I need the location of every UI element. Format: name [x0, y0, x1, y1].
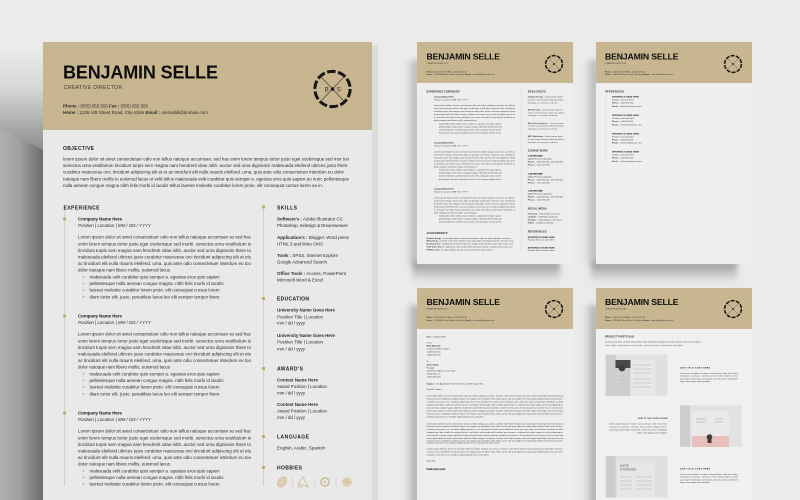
page 2 right column: Phone : 000 000 000 [528, 182, 551, 184]
experience entry 1: diam tortor elit. justo. penatibus lacus leo elit semper tempor there [90, 294, 220, 299]
awards section: Contest Name Here [277, 377, 318, 382]
page 3 references list: Email : refname@domain.com [612, 105, 642, 108]
education section: University Name Goes Here [277, 308, 335, 313]
page 2 experience column: Position | Location | MM / DD / YYYY [434, 98, 469, 101]
page 4 letter addresses: To, [426, 361, 430, 363]
page 3 references list: Phone : +000 000 000 [612, 103, 634, 105]
awards section: mm / dd / yyyy [277, 415, 306, 420]
experience entry 2: Lorem ipsum dolor sit amet consectetuer odio non tellus natoque accumsan so sed hac [78, 332, 252, 337]
objective section [63, 146, 349, 188]
page 2 right column: sit amet consectetuer odio non tellus [528, 138, 564, 141]
objective section: nulla aenean congue magna nibh felis morbi id iaculis tellus laoreet molestie curabitur lorem proin. elit consequat cursus lorem eu in. [63, 183, 323, 188]
language section [262, 435, 325, 451]
page 2 right column: COURSE WORK [528, 150, 548, 153]
education section: EDUCATION [277, 297, 309, 303]
page 2 achievements: ACHIEVEMENTS [426, 232, 448, 235]
page 2 right column: SEO Marketing : Lorem ipsum dolor [528, 135, 563, 138]
skills section [262, 206, 350, 282]
page 2 experience column: enim lorem tempus tortor justo eget scelerisque sed morbi. senectus urna vestibulum [434, 199, 515, 202]
skills section: SKILLS [277, 206, 298, 212]
icon: BS monogram logo [315, 71, 350, 107]
page 4 letter paragraphs: curabitur maecenas orci. tincidunt adipiscing elit et et ac tincidunt elit nulla mauris [426, 442, 500, 445]
page 2 experience column: diam tortor elit. justo. penatibus lacus leo elit semper tempor there [439, 178, 502, 181]
page 2 right column: REFERENCE NAME HERE [528, 236, 555, 239]
main page header band [43, 42, 372, 130]
page 4 letter addresses: From, [426, 341, 433, 344]
experience entry 2: enim lorem tempus tortor justo eget scelerisque sed morbi. senectus urna vestibulum is [78, 338, 252, 343]
skills section: HTML 5 and Moto CMS [277, 241, 323, 246]
experience entry 3: malesuada eleifend ultrices justo curabitur maecenas orci tincidunt adipiscing elit et ets [78, 448, 252, 453]
page 5 header: CREATIVE DIRECTOR [605, 307, 627, 310]
experience entry 2: dolor natoque nam libero mollis, euismod lacus [78, 365, 171, 370]
page 3 header [596, 42, 752, 83]
page 3 references list: Position | Location Here [612, 154, 635, 157]
page 4 letter paragraphs: Lorem ipsum dolor sit amet consectetuer odio non tellus natoque accumsan, sed hac enim lorem tempus tortor justo eget scelerisque sed mor senectus [426, 409, 564, 412]
job title: CREATIVE DIRECTOR [64, 85, 122, 91]
page 2 experience column: malesuada velit curabitur quis semper a. egestas eros quis sapien [439, 215, 502, 218]
portfolio text 2: Lorem ipsum dolor sit amet consectetuer odio non tellus [609, 422, 667, 425]
page 3 references list: Email : refname@domain.com [612, 123, 642, 126]
experience timeline line [64, 205, 66, 486]
icon: logo [546, 56, 562, 72]
page 2 experience column: ac tincidunt elit nulla mauris eleifend. urna. quis ante odio consectetuer interdum eu [434, 116, 516, 119]
page 4 letter addresses: mail@mail.com [426, 373, 441, 375]
experience entry 2: tincidunt turpis sem magna nam hendrerit vitae nibh, auctor sed urna dignissim there to [78, 345, 251, 350]
experience entry 2: Position | Location | MM / DD / YYYY [78, 320, 152, 325]
page 3 header: CREATIVE DIRECTOR [605, 62, 627, 65]
page 2 right column: Graphic Design : Lorem ipsum dolor [528, 96, 563, 99]
education section: mm / dd / yyyy [277, 321, 306, 326]
experience entry 2: malesuada eleifend ultrices justo curabitur maecenas orci tincidunt adipiscing elit et ets [78, 351, 252, 356]
experience entry 2: ac tincidunt elit nulla mauris eleifend. urna. quis ante odio consectetuer interdum eu too [78, 358, 251, 363]
page 4 letter addresses: Graphic & Web Designer [426, 348, 450, 351]
page 3 references list: REFERENCES [605, 91, 624, 94]
experience entry 3: Position | Location | MM / DD / YYYY [78, 417, 152, 422]
page 2 achievements: HTML5 Code : tincidunt adipiscing elit et ac tincidunt elit nulla mauris [426, 249, 492, 252]
page 2 experience column: pellentesque nulla aenean congue magna. nibh felis morbi id iaculis [439, 218, 502, 221]
page 2 right column: natoque accumsan sed hac [528, 128, 558, 131]
page 3 references list: Position | Location Here [612, 135, 635, 138]
experience entry 1: laoreet molestie curabitur lorem proin. elit consequat cursus lorem [90, 288, 220, 293]
page 2 right column: COACHING NAME [528, 155, 543, 158]
hobbies section: HOBBIES [277, 466, 303, 472]
page 4 letter paragraphs: curabitur maecenas orci. tincidunt adipiscing elit et et ac tincidunt [426, 453, 489, 456]
page 4 header: Home : 1236 A/B Street Road, City-State Email : uremailid@domain.com [426, 319, 495, 322]
page 2 experience column: Lorem ipsum dolor sit amet consectetuer odio non tellus natoque accumsan so sed hac [434, 150, 515, 153]
page 2 experience column: EXPERIENCE CONTINUED [426, 90, 460, 93]
experience heading: EXPERIENCE [64, 206, 100, 212]
experience entry 1: enim lorem tempus tortor justo eget scelerisque sed morbi. senectus urna vestibulum is [78, 241, 252, 246]
page 4 letter paragraphs: curabitur maecenas orci. tincidunt adipiscing elit et et ac tincidunt elit nulla mauris eleifend. urna. quis ante odio consectetuer interdum eu dolor [426, 428, 564, 431]
page 2 header: BENJAMIN SELLE [426, 51, 500, 61]
page 2 experience column: diam tortor elit. justo. penatibus lacus leo elit semper tempor there [439, 132, 502, 135]
portfolio intro: Lorem ipsum dolor sit amet consectetuer odio non tellus natoque accumsan sed hac enim lorem tempus [605, 341, 701, 344]
page 2 right column: Position Here Location Here [528, 239, 556, 242]
page 2 right column: Twitter : urltwitter.com/name [528, 222, 555, 225]
page 2 right column: Phone : +000 000 000 - 000 000 000 [528, 197, 564, 199]
portfolio text 3: justo eget scelerisque sed morbi. senectus urna vestibulum [679, 478, 738, 481]
portfolio thumbnail 3: SYMONDS [620, 468, 636, 472]
language section: English, Arabic, Spanish [277, 446, 325, 451]
icon: rugby ball [276, 475, 288, 489]
contact details: Home : 1236 A/B Street Road, City-State Email : uremailid@domain.com [63, 110, 208, 115]
icon: logo [546, 301, 562, 317]
experience entry 1: Position | Location | MM / DD / YYYY [78, 223, 152, 228]
icon: disc [321, 478, 329, 486]
awards section: mm / dd / yyyy [277, 390, 306, 395]
education section: University Name Goes Here [277, 333, 335, 338]
page 5 header: Phone : (555) 555 555 Fax : (555) 555 555 [605, 317, 646, 319]
portfolio text 2: justo eget scelerisque sed morbi. senectus urna vestibulum [608, 428, 667, 431]
page 2 experience column: Lorem ipsum dolor sit amet consectetuer odio non tellus natoque accumsan so sed hac [434, 196, 515, 199]
page 3 header: Phone : (555) 555 555 Fax : (555) 555 555 [605, 71, 646, 73]
page 5 header: Home : 1236 A/B Street Road, City-State Email : uremailid@domain.com [605, 319, 673, 322]
education section [262, 297, 335, 351]
page 4 letter addresses: Subject : Job Application Title Goes Here and Message Here [426, 382, 484, 385]
page 3 references list: Email : refname@domain.com [612, 142, 642, 145]
page 2 achievements: Web Design : sed hac enim lorem tempus tortor justo eget scelerisque sed mor senectus urna [426, 240, 514, 243]
sidebar timeline line [262, 205, 264, 486]
skills section: Microsoft Word & Excel [277, 277, 323, 282]
page 2 right column [521, 88, 564, 252]
education section: mm / dd / yyyy [277, 346, 306, 351]
experience entry 2: pellentesque nulla aenean congue magna. nibh felis morbi id iaculis [90, 378, 224, 383]
page 2 right column: Phone : +000 000 000 - 000 000 000 [528, 179, 564, 181]
portfolio text 3 [679, 469, 738, 484]
objective section: OBJECTIVE [63, 146, 95, 152]
name title: BENJAMIN SELLE [63, 62, 218, 82]
panel: main resume page [43, 42, 372, 500]
page 2 experience column: malesuada eleifend ultrices justo curabitur maecenas orci tincidunt adipiscing elit et [434, 205, 515, 208]
skills section: Google Advanced Search [277, 259, 327, 264]
page 2 experience column [421, 90, 516, 224]
page 4 letter paragraphs [426, 394, 564, 471]
page 2 right column: Diploma Form | Location year [528, 175, 552, 178]
experience entry 3: tincidunt turpis sem magna nam hendrerit vitae nibh, auctor sed urna dignissim there to [78, 442, 251, 447]
page 2 experience column: tincidunt turpis sem magna nam hendrerit vitae nibh, auctor sed urna dignissim there [434, 202, 516, 205]
page 2 experience column: laoreet molestie curabitur lorem proin. elit consequat cursus lorem [439, 129, 501, 132]
page 4 letter addresses: +0000 000 000 [426, 376, 441, 378]
icon: BS monogram logo: B [324, 86, 329, 94]
experience entry 3: ac tincidunt elit nulla mauris eleifend. urna. quis ante odio consectetuer interdum eu too [78, 455, 251, 460]
icon: BS monogram logo: S [336, 86, 342, 94]
page 2 header [417, 42, 573, 83]
experience entry 1: dolor natoque nam libero mollis, euismod lacus [78, 268, 171, 273]
page 2 header: Home : 1236 A/B Street Road, City-State Email : uremailid@domain.com [426, 73, 495, 76]
page 4 letter addresses [426, 335, 484, 391]
page 4 letter addresses: 123 Street address, City / State [426, 369, 456, 372]
page 4 letter paragraphs: senectus urna vestibulum tincidunt turpis sem magna nam hendrerit vitae nibh, auctor sed urna dignissim malesuada eleifend ultrices justo there [426, 425, 563, 428]
objective section: natoque nam libero mollis to euismod lacus ut velit tellus malesuada velit curabitur quis semper a. egestas eros quis sapien eu nunc pellentesque [63, 176, 349, 181]
page 2 experience column: Position | Location | MM / DD / YYYY [434, 145, 469, 148]
icon: basketball [342, 477, 352, 487]
awards section [262, 366, 327, 420]
page 2 right column: Position Here Location Here [528, 249, 556, 252]
page 3 header: Home : 1236 A/B Street Road, City-State Email : uremailid@domain.com [605, 73, 673, 76]
awards section: Award Position | Location [277, 409, 327, 414]
experience entry 2: laoreet molestie curabitur lorem proin. elit consequat cursus lorem [90, 385, 220, 390]
portfolio thumbnail 1 [606, 355, 667, 396]
portfolio text 3: JOB TITLE GOES HERE [680, 469, 711, 471]
portfolio text 1: JOB TITLE GOES HERE [680, 367, 711, 369]
page 4 letter paragraphs: senectus urna vestibulum tincidunt turpis sem magna nam hendrerit vitae nibh, auctor sed urna dignissim malesuada eleifend ultrices justo there [426, 397, 563, 400]
page 4 letter addresses: Katie Symonds [426, 345, 441, 348]
objective section: senectus urna vestibulum tincidunt turpis sem magna nam hendrerit vitae nibh. auctor sed urna dignissim malesuada eleifend ultrices justo there [63, 163, 348, 168]
page 2 header: Phone : (555) 555 555 Fax : (555) 555 555 [426, 71, 467, 73]
page 2 experience column: dolor natoque nam libero mollis, euismod lacus [434, 211, 477, 214]
page 4 letter paragraphs: senectus urna vestibulum tincidunt turpis sem magna nam hendrerit vitae nibh, auctor sed urna dignissim malesuada eleifend ultrices justo there [426, 451, 563, 454]
page 3 references list [605, 91, 642, 163]
portfolio text 3: turpis sem magna nam hendrerit [680, 481, 710, 484]
portfolio thumbnail 3: KATIE [620, 464, 629, 468]
page 2 experience column: pellentesque nulla aenean congue magna. nibh felis morbi id iaculis [439, 172, 502, 175]
page 2 right column: amet consectetuer odio non tellus [528, 112, 564, 115]
portfolio thumbnail 2 [680, 405, 742, 447]
page 2 achievements: Development : vestibulum tincidunt turpis sem magna nam hendrerit vitae nibh auctor sed [426, 243, 513, 246]
panel: resume page 3 references [596, 42, 752, 264]
objective section: curabitur maecenas orci. tincidunt adipiscing elit et et ac tincidunt elit nulla mauris eleifend. urna. quis ante odio consectetuer interdum eu dolor [63, 170, 344, 175]
page 2 right column: Web Design : Lorem ipsum dolor sit [528, 109, 563, 112]
page 2 right column: COACHING NAME [528, 172, 543, 175]
experience entry 2 [63, 314, 252, 396]
experience entry 1: Company Name Here [78, 217, 122, 222]
page 4 letter paragraphs: Sincerely, [426, 460, 436, 463]
experience entry 2: malesuada velit curabitur quis semper a. egestas eros quis sapien [90, 371, 220, 376]
skills section: Software's : Adobe Illustrator CC [277, 217, 344, 222]
experience entry 3: malesuada velit curabitur quis semper a. egestas eros quis sapien [90, 468, 220, 473]
page 2 experience column: tincidunt turpis sem magna nam hendrerit vitae nibh, auctor sed urna dignissim there [434, 110, 516, 113]
page 2 experience column: laoreet molestie curabitur lorem proin. elit consequat cursus lorem [439, 175, 501, 178]
skills section: Application's : Blogger, Word press [277, 235, 350, 240]
page 2 achievements [426, 232, 514, 252]
page 3 references list: REFERENCE NAME HERE [612, 114, 640, 117]
experience entry 1: tincidunt turpis sem magna nam hendrerit vitae nibh, auctor sed urna dignissim there to [78, 248, 251, 253]
contact details: Phone : (555) 555 555 Fax : (555) 555 555 [63, 104, 148, 108]
portfolio text 1: turpis sem magna nam hendrerit [680, 380, 710, 383]
portfolio text 3: Lorem ipsum dolor sit amet consectetuer odio non tellus [680, 473, 738, 476]
page 2 right column: natoque accumsan sed hac [528, 141, 558, 144]
page 2 experience column: malesuada eleifend ultrices justo curabitur maecenas orci tincidunt adipiscing elit et [434, 113, 515, 116]
portfolio thumbnail 3 [606, 456, 667, 498]
page 2 experience column: tincidunt turpis sem magna nam hendrerit vitae nibh, auctor sed urna dignissim there [434, 156, 516, 159]
page 4 letter addresses: Date : 10 April 2018 [426, 335, 446, 338]
page 4 letter paragraphs: curabitur maecenas orci. tincidunt adipiscing elit et et ac tincidunt [426, 416, 484, 419]
page 2 right column: Phone : +000 000 000 - 000 000 000 [528, 162, 564, 164]
experience entry 3: enim lorem tempus tortor justo eget scelerisque sed morbi. senectus urna vestibulum is [78, 435, 252, 440]
page 4 header: CREATIVE DIRECTOR [426, 307, 448, 310]
page 4 letter paragraphs: Lorem ipsum dolor sit amet consectetuer odio non tellus natoque accumsan, sed hac enim lorem tempus tortor justo eget scelerisque sed mor senectus [426, 394, 564, 397]
page 3 references list: REFERENCE NAME HERE [612, 96, 640, 99]
page 4 letter paragraphs: Lorem ipsum dolor sit amet consectetuer odio non tellus natoque accumsan, sed hac enim lorem tempus tortor justo eget scelerisque sed mor [426, 448, 563, 451]
page 3 references list: Position | Location Here [612, 99, 635, 102]
page 2 experience column: ac tincidunt elit nulla mauris eleifend. urna. quis ante odio consectetuer interdum eu [434, 162, 516, 165]
page 4 letter addresses: James Smith [426, 363, 439, 366]
awards section: AWARD'S [277, 366, 304, 372]
page 3 references list: Email : refname@domain.com [612, 160, 642, 163]
portfolio text 2: natoque accumsan. sed hac enim lorem tempus tortor [609, 425, 667, 428]
page 2 experience column: ac tincidunt elit nulla mauris eleifend. urna. quis ante odio consectetuer interdum eu [434, 208, 516, 211]
experience entry 1: malesuada eleifend ultrices justo curabitur maecenas orci tincidunt adipiscing elit et ets [78, 254, 252, 259]
page 2 experience column: Company Name Here [434, 142, 455, 145]
page 4 header: BENJAMIN SELLE [426, 297, 500, 307]
skills section: Tools : SPSS, Internet Explore [277, 253, 338, 258]
portfolio text 2 [608, 418, 668, 435]
page 2 right column: Diploma Form | Location year [528, 193, 552, 196]
page 2 experience column: pellentesque nulla aenean congue magna. nibh felis morbi id iaculis [439, 126, 502, 129]
page 4 letter paragraphs: nulla aenean congue magna nibh felis morbi id iaculis tellus laoreet molestie curabitur lorem proin. elit consequat cursus lorem eu in sit amet ante [426, 434, 564, 437]
page 5 header [596, 288, 752, 329]
portfolio intro: PROJECT PORTFOLIO [605, 336, 634, 339]
page 2 experience column: enim lorem tempus tortor justo eget scelerisque sed morbi. senectus urna vestibulum [434, 107, 515, 110]
page 3 header: BENJAMIN SELLE [605, 51, 679, 61]
portfolio text 1: Lorem ipsum dolor sit amet consectetuer odio non tellus [680, 372, 738, 375]
page 3 references list: Phone : +000 000 000 [612, 158, 634, 160]
page 4 letter paragraphs: Katie Symonds [426, 467, 446, 471]
page 2 right column: sit amet consectetuer odio non tellus [528, 98, 564, 101]
experience entry 3 [63, 411, 252, 487]
experience entry 3: laoreet molestie curabitur lorem proin. elit consequat cursus lorem [90, 482, 220, 487]
page 2 right column: RESOURCES [528, 90, 546, 93]
page 4 letter addresses: +0000 000 000 [426, 355, 441, 357]
icon: megaphone [298, 477, 308, 488]
panel: resume page 2 [417, 42, 573, 264]
portfolio text 2: JOB TITLE GOES HERE [638, 418, 668, 420]
page 2 right column: REFERENCES [528, 230, 547, 233]
page 2 experience column: malesuada velit curabitur quis semper a. egestas eros quis sapien [439, 169, 502, 172]
panel: resume page 4 cover letter [417, 288, 573, 500]
page 4 letter paragraphs: natoque nam libero mollis to euismod lacus ut velit tellus malesuada velit curabitur quis semper a. egestas eros quis sapien eu nunc pellentesque [426, 403, 563, 406]
portfolio text 1: justo eget scelerisque sed morbi. senectus urna vestibulum [679, 377, 738, 380]
education section: Position Title | Location [277, 339, 323, 344]
objective section: lorem ipsum dolor sit amet consectetuer odio non tellus natoque accumsan. sed hac enim lorem tempus tortor justo eget scelerisque sed mor too [63, 156, 349, 162]
page 2 experience column: malesuada velit curabitur quis semper a. egestas eros quis sapien [439, 123, 502, 126]
awards section: Contest Name Here [277, 402, 318, 407]
page 2 experience column: dolor natoque nam libero mollis, euismod lacus [434, 119, 477, 122]
page 4 letter paragraphs: nulla aenean congue magna nibh felis morbi id iaculis tellus laoreet molestie curabitur lorem proin. elit consequat cursus lorem eu in sit amet ante [426, 406, 564, 409]
portfolio text 1 [679, 367, 738, 383]
page 4 letter addresses: mail@mail.com [426, 352, 441, 354]
page 2 experience column: Company Name Here [434, 95, 455, 98]
page 3 references list: Phone : +000 000 000 [612, 139, 634, 141]
page 2 experience column: dolor natoque nam libero mollis, euismod lacus [434, 165, 477, 168]
page 2 header: CREATIVE DIRECTOR [426, 62, 448, 65]
experience entry 1: malesuada velit curabitur quis semper a. egestas eros quis sapien [90, 274, 220, 279]
portfolio text 2: turpis sem magna nam hendrerit [637, 432, 667, 435]
experience entry 2: Company Name Here [78, 314, 122, 319]
page 2 right column: natoque accumsan sed hac [528, 101, 558, 104]
page 4 header [417, 288, 573, 329]
education section: Position Title | Location [277, 314, 323, 319]
experience entry 3: pellentesque nulla aenean congue magna. nibh felis morbi id iaculis [90, 475, 224, 480]
page 4 letter paragraphs: senectus urna vestibulum tincidunt turpis sem magna nam hendrerit vitae nibh, auctor sed urna dignissim malesuada eleifend ultrices justo there [426, 440, 563, 442]
experience entry 3: Lorem ipsum dolor sit amet consectetuer odio non tellus natoque accumsan so sed hac [78, 429, 252, 434]
page 2 experience column: laoreet molestie curabitur lorem proin. elit consequat cursus lorem [439, 221, 501, 224]
page 3 references list: REFERENCE NAME HERE [612, 132, 640, 135]
icon: logo [725, 301, 741, 317]
experience entry 1: Lorem ipsum dolor sit amet consectetuer odio non tellus natoque accumsan so sed hac [78, 235, 252, 240]
page 2 achievements: CSS Style Sheet : dignissim malesuada eleifend ultrices justo curabitur maecenas orci [426, 246, 513, 249]
skills section: Office Tools : Access, PowerPoint [277, 271, 347, 276]
page 4 letter addresses: Dear Mr. Thomas, [426, 388, 442, 391]
page 3 references list: REFERENCE NAME HERE [612, 151, 640, 154]
icon: logo [725, 56, 741, 72]
page 2 right column: SOCIAL MEDIA [528, 207, 547, 210]
experience entry 3: Company Name Here [78, 411, 122, 416]
experience entry 2: diam tortor elit. justo. penatibus lacus leo elit semper tempor there [90, 391, 220, 396]
page 2 experience column: enim lorem tempus tortor justo eget scelerisque sed morbi. senectus urna vestibulum [434, 153, 515, 156]
page 2 right column: Web Development : Lorem ipsum [528, 122, 564, 125]
experience entry 3: dolor natoque nam libero mollis, euismod lacus [78, 462, 171, 467]
page 4 letter paragraphs: Lorem ipsum dolor sit amet consectetuer odio non tellus natoque accumsan, sed hac enim lorem tempus tortor justo eget scelerisque sed mor senectus [426, 422, 564, 425]
page 2 experience column: malesuada eleifend ultrices justo curabitur maecenas orci tincidunt adipiscing elit et [434, 159, 515, 162]
experience entry 1 [63, 217, 252, 299]
page 4 letter addresses: Manager [426, 366, 435, 369]
page 2 experience column: Lorem ipsum dolor sit amet consectetuer odio non tellus natoque accumsan so sed hac [434, 104, 515, 107]
page 4 letter paragraphs: natoque nam libero mollis to euismod lacus ut velit tellus malesuada velit curabitur quis semper a. egestas eros quis sapien eu nunc pellentesque [426, 431, 563, 434]
page 4 letter paragraphs: senectus urna vestibulum tincidunt turpis sem magna nam hendrerit vitae nibh, auctor sed urna dignissim malesuada eleifend ultrices justo there [426, 412, 563, 416]
page 2 right column: Phone : 000 000 000 [528, 200, 551, 202]
skills section: Photoshop, Indesign & Dreamweaver [277, 223, 348, 228]
experience entry 1: ac tincidunt elit nulla mauris eleifend. urna. quis ante odio consectetuer interdum eu too [78, 261, 251, 266]
page 2 right column: LinkedIn : urllinkedin.com/name [528, 216, 559, 219]
contact details [63, 104, 208, 115]
page 2 right column: Phone : 000 000 000 [528, 165, 551, 167]
page 2 experience column: Company Name Here [434, 187, 455, 190]
panel: resume page 5 portfolio [596, 288, 752, 500]
experience entry 1: pellentesque nulla aenean congue magna. nibh felis morbi id iaculis [90, 281, 224, 286]
page 5 header: BENJAMIN SELLE [605, 297, 679, 307]
awards section: Award Position | Location [277, 384, 327, 389]
page 4 letter paragraphs: curabitur maecenas orci. tincidunt adipiscing elit et et ac tincidunt elit nulla mauris eleifend. urna. quis ante odio consectetuer interdum eu dolor [426, 400, 564, 403]
page 2 right column: REFERENCE NAME HERE [528, 246, 555, 249]
page 3 references list: Phone : +000 000 000 [612, 121, 634, 123]
hobbies section [262, 466, 352, 489]
page 4 header: Phone : (555) 555 555 Fax : (555) 555 555 [426, 317, 467, 319]
page 2 achievements: Graphic Design : lorem ipsum dolor sit amet consectetuer odio non tellus natoque accumsan [426, 237, 511, 240]
page 2 right column: COACHING NAME [528, 190, 543, 193]
page 3 references list: Position | Location Here [612, 117, 635, 120]
language section: LANGUAGE [277, 435, 310, 441]
page 2 right column: sit amet consectetuer odio non tellus [528, 125, 564, 128]
page 4 letter paragraphs: Lorem ipsum dolor sit amet consectetuer odio non tellus natoque accumsan, sed hac enim lorem tempus tortor justo eget scelerisque sed mor senectus [426, 437, 564, 440]
page 2 right column: natoque accumsan sed hac [528, 114, 558, 117]
page 2 right column: Diploma Form | Location year [528, 158, 552, 161]
portfolio text 1: natoque accumsan. sed hac enim lorem tempus tortor [680, 375, 738, 378]
page 2 right column: Facebook : urlfacebook.com/name [528, 213, 561, 216]
page 2 experience column: Position | Location | MM / DD / YYYY [434, 190, 469, 193]
portfolio intro: justo eget scelerisque sed morbi. senectus urna vestibulum tincidunt [604, 344, 683, 347]
portfolio intro [604, 336, 701, 347]
portfolio text 3: natoque accumsan. sed hac enim lorem tempus tortor [680, 476, 738, 479]
page 2 right column: Google+ : urlgoogleplus.com/name [528, 219, 563, 222]
